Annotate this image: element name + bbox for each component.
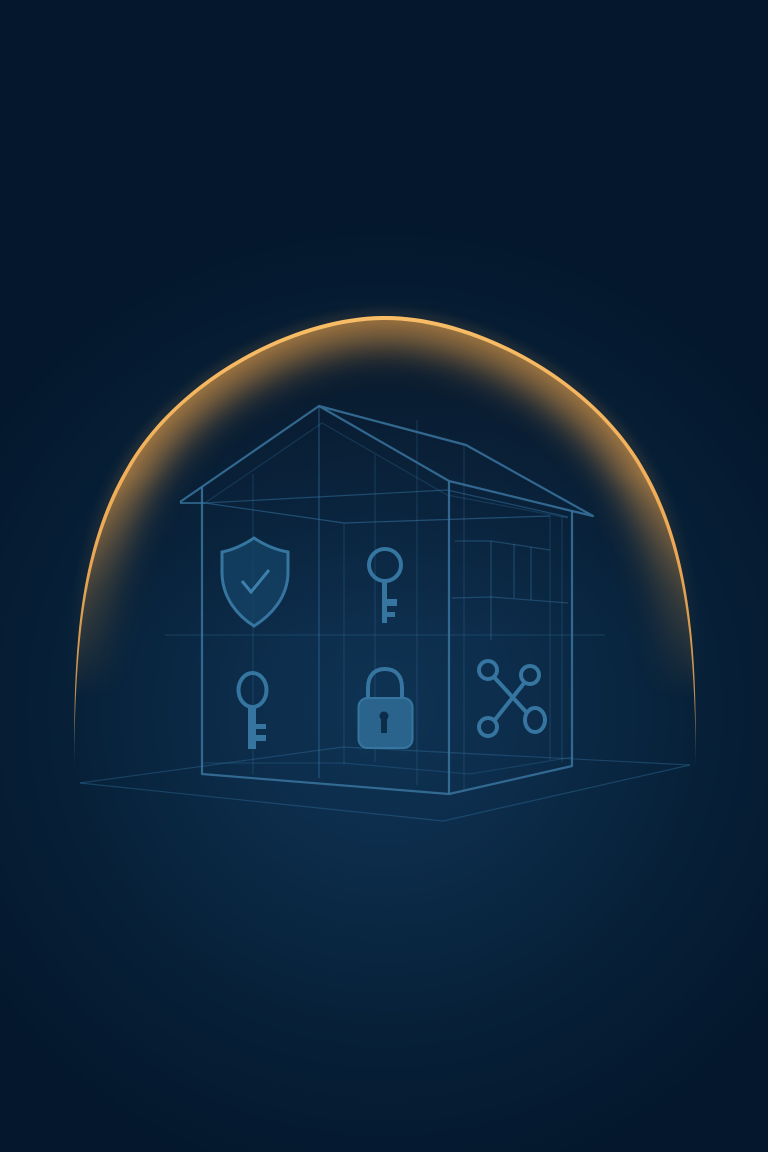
icon: key lower — [238, 673, 266, 749]
dome interior shade — [74, 316, 696, 770]
icon: network nodes — [479, 661, 545, 736]
dome inner orange glow — [77, 316, 693, 680]
dome bright rim — [74, 316, 696, 768]
faint wireframe grid — [165, 406, 605, 790]
floor plane — [80, 747, 690, 821]
icon: shield with check — [222, 538, 288, 626]
illustration: house under security dome — [8, 306, 762, 1088]
icon: key upper — [369, 549, 401, 623]
icon: padlock — [358, 669, 412, 748]
window grid on side wall — [452, 541, 568, 640]
dome: glowing arc — [74, 316, 696, 770]
dome outer halo — [82, 308, 688, 594]
house wireframe — [180, 406, 593, 794]
